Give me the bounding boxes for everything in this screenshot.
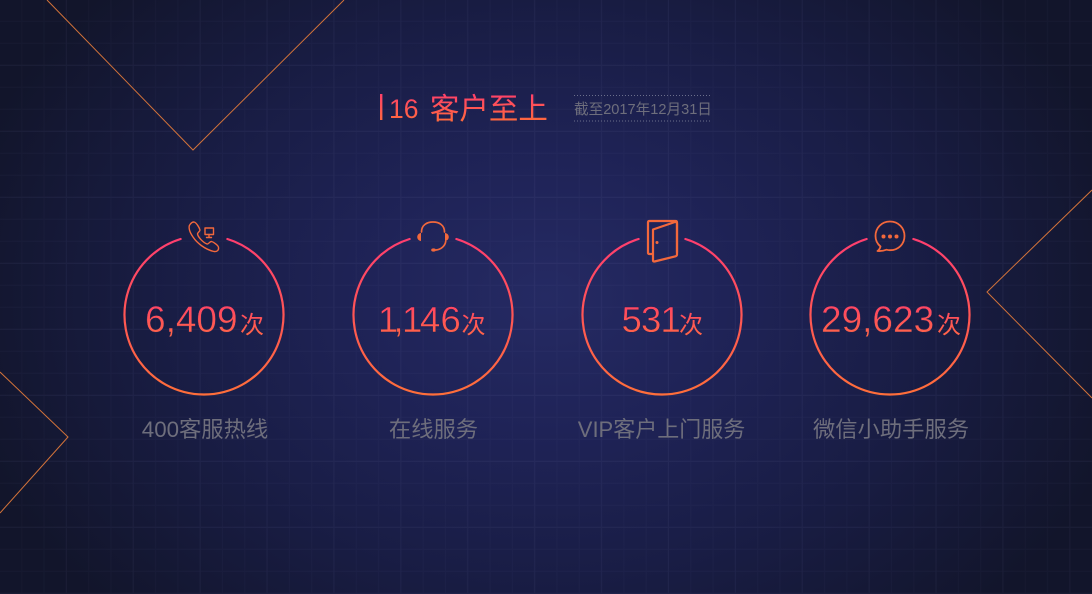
value: 次 (937, 312, 961, 339)
value: 531 (622, 299, 681, 340)
ring (810, 239, 970, 394)
icon: headset (417, 222, 449, 252)
value: 次 (240, 312, 264, 339)
value: 1,146 (378, 299, 461, 340)
panel: 400 hotline (124, 222, 284, 442)
icon: telephone (189, 222, 219, 252)
decoration: right chevron (987, 190, 1092, 398)
title (380, 93, 548, 126)
panel: online service (353, 222, 513, 442)
label: VIP客户上门服务 (578, 417, 745, 442)
ring (582, 239, 742, 394)
label: 微信小助手服务 (813, 417, 969, 442)
title marker bar (380, 94, 382, 120)
title text: 16 (389, 94, 418, 124)
decoration: left chevron (0, 372, 68, 513)
ring (353, 239, 513, 394)
value: 29,623 (821, 299, 934, 340)
label: 400客服热线 (142, 417, 268, 442)
date note (574, 96, 712, 121)
panel: VIP door service (578, 221, 745, 442)
icon: door (648, 221, 677, 262)
value: 6,409 (145, 299, 238, 340)
value: 次 (679, 312, 703, 339)
title text: 客户至上 (430, 93, 548, 126)
ring (124, 239, 284, 394)
decoration: top-left chevron (47, 0, 344, 150)
icon: chat bubble (876, 222, 904, 251)
value: 次 (462, 312, 486, 339)
date note: 截至2017年12月31日 (574, 101, 712, 118)
panel: WeChat assistant (810, 222, 970, 442)
label: 在线服务 (389, 417, 478, 442)
